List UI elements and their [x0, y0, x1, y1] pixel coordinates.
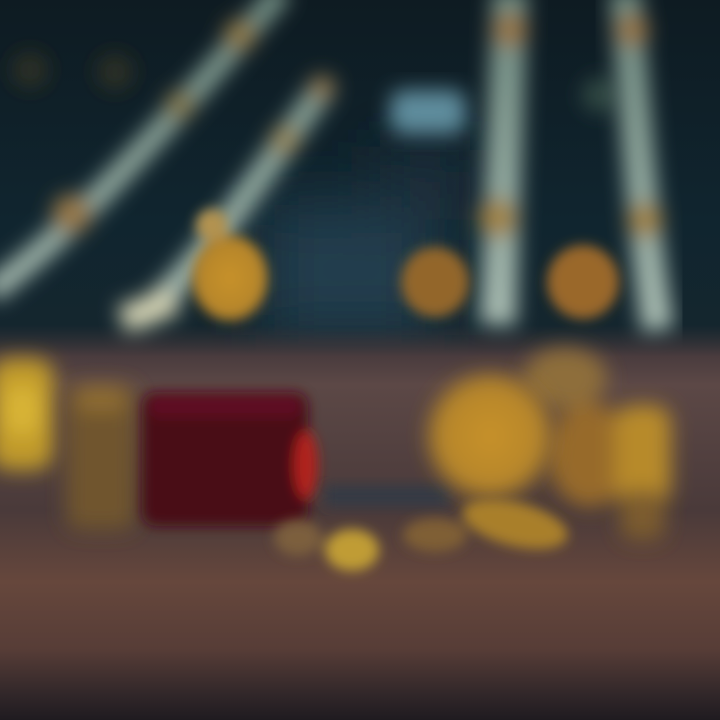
dark bar behind coins	[325, 485, 450, 507]
background wall	[0, 0, 720, 370]
dim wall dots	[12, 52, 618, 113]
gold coin: centre	[401, 247, 469, 317]
chart band: far left diagonal	[0, 0, 282, 292]
loose coins: under red box	[274, 520, 379, 571]
red box	[142, 392, 318, 526]
coin stack: second left	[66, 385, 136, 530]
chart band: centre vertical	[478, 0, 528, 325]
gold coin: right	[547, 245, 619, 319]
chart band: second diagonal	[122, 75, 335, 320]
coin stack: far left	[0, 358, 54, 470]
pale blue label blob	[390, 90, 466, 134]
wall shading	[265, 150, 470, 335]
coin pile: right	[523, 348, 671, 540]
gold coin: left	[192, 209, 268, 321]
chart band: right vertical	[615, 0, 663, 330]
large gold coin	[428, 374, 552, 498]
table surface	[0, 325, 720, 720]
loose coins: centre front	[403, 490, 573, 558]
